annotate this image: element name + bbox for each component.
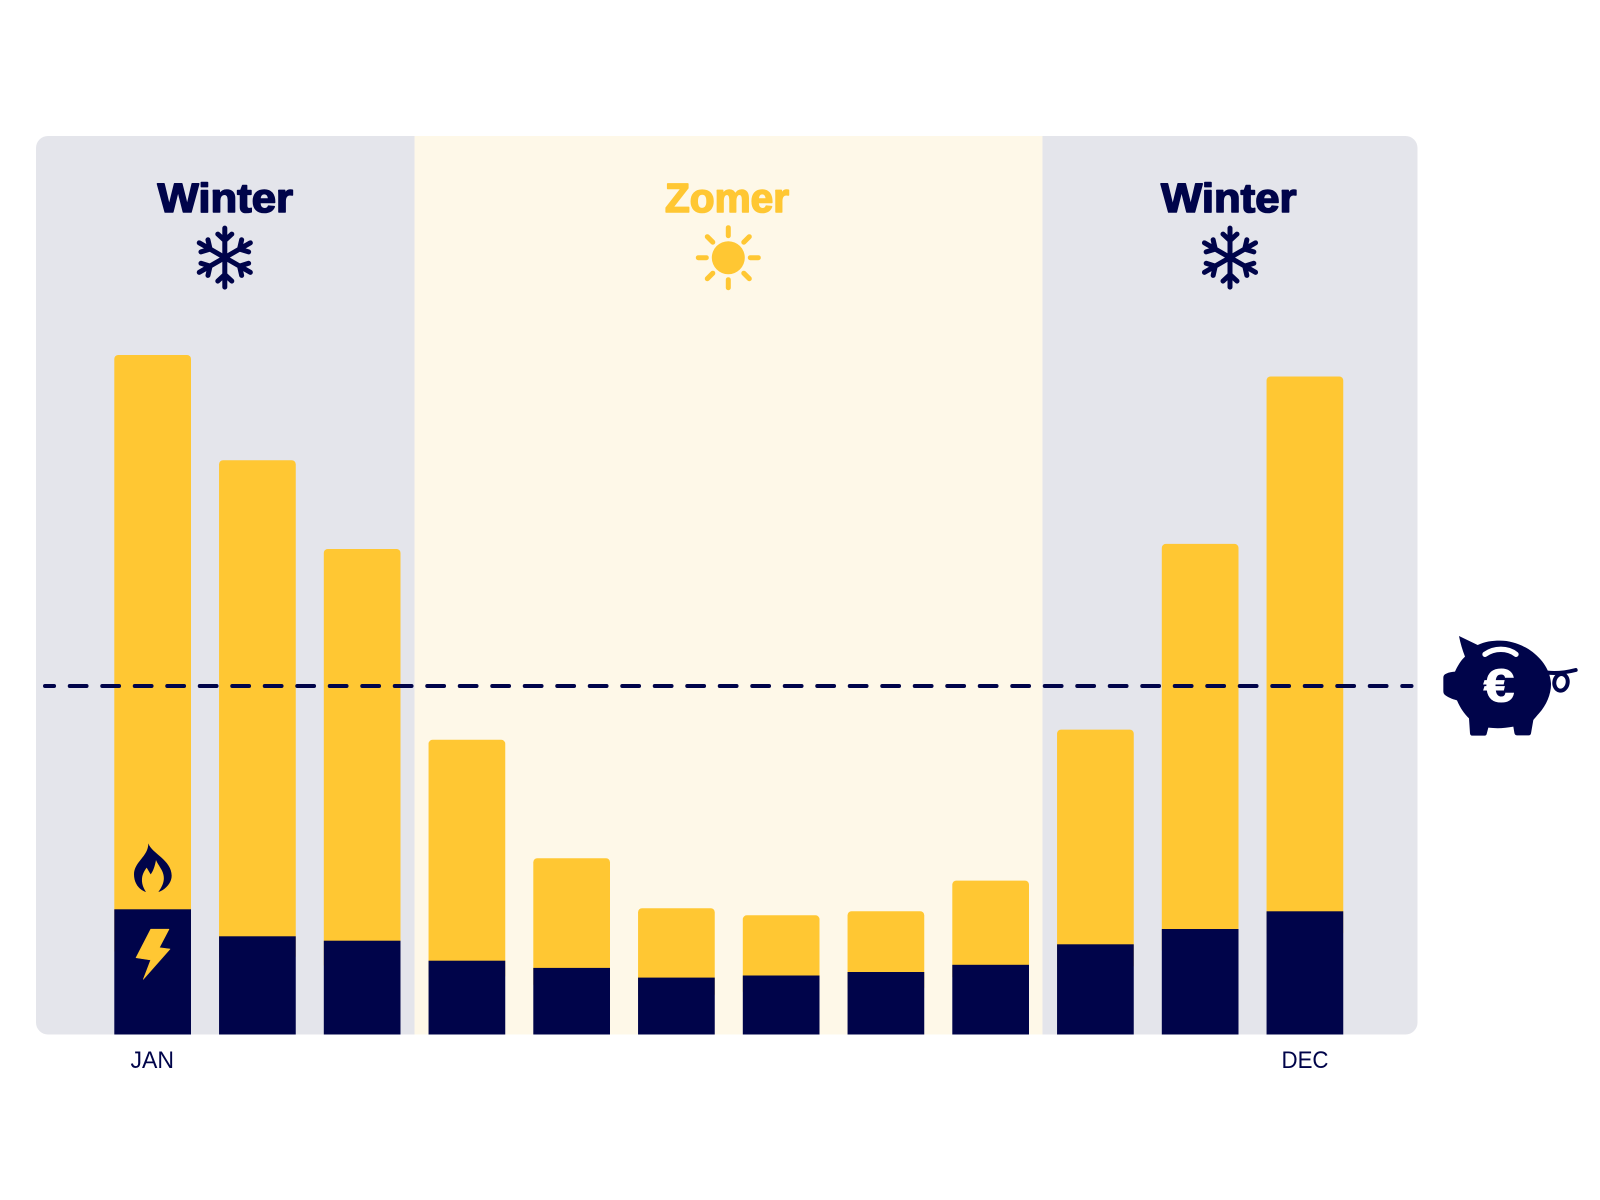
month label: JAN: JAN	[130, 1047, 174, 1074]
panel: winter left and right background	[36, 136, 1418, 1034]
panel: chart background with seasons	[36, 136, 1418, 1034]
icon: snowflake right	[1201, 228, 1259, 287]
heading: Zomer: Zomer	[665, 175, 789, 221]
heading: Winter left: Winter	[158, 175, 293, 221]
icon: piggy bank	[1443, 636, 1576, 736]
icon: snowflake left	[196, 228, 254, 287]
bar chart: monthly stacked bars	[114, 355, 1343, 1034]
pig body	[1443, 636, 1551, 736]
icon: sun	[698, 228, 758, 288]
dashed budget line	[45, 684, 1412, 688]
bar: December	[1267, 376, 1343, 1034]
icon: lightning bolt	[136, 929, 170, 979]
bar: September	[952, 881, 1029, 1034]
bar: May	[533, 858, 610, 1034]
piggy bank coin slot	[1485, 649, 1516, 654]
bar: November	[1162, 544, 1238, 1034]
heading: Winter right: Winter	[1161, 175, 1297, 221]
euro sign: €	[1484, 660, 1514, 711]
panel: summer background	[414, 136, 1042, 1034]
bar: February	[219, 460, 296, 1034]
bar: August	[848, 911, 924, 1034]
month label: DEC: DEC	[1282, 1047, 1328, 1074]
bar: March	[324, 549, 400, 1034]
bar: April	[429, 740, 505, 1034]
bar: October	[1057, 730, 1134, 1034]
bar: June	[638, 908, 715, 1034]
bar: July	[743, 915, 820, 1034]
bar: January	[114, 355, 191, 1034]
pig tail	[1548, 670, 1576, 692]
icon: gas flame	[134, 843, 172, 892]
